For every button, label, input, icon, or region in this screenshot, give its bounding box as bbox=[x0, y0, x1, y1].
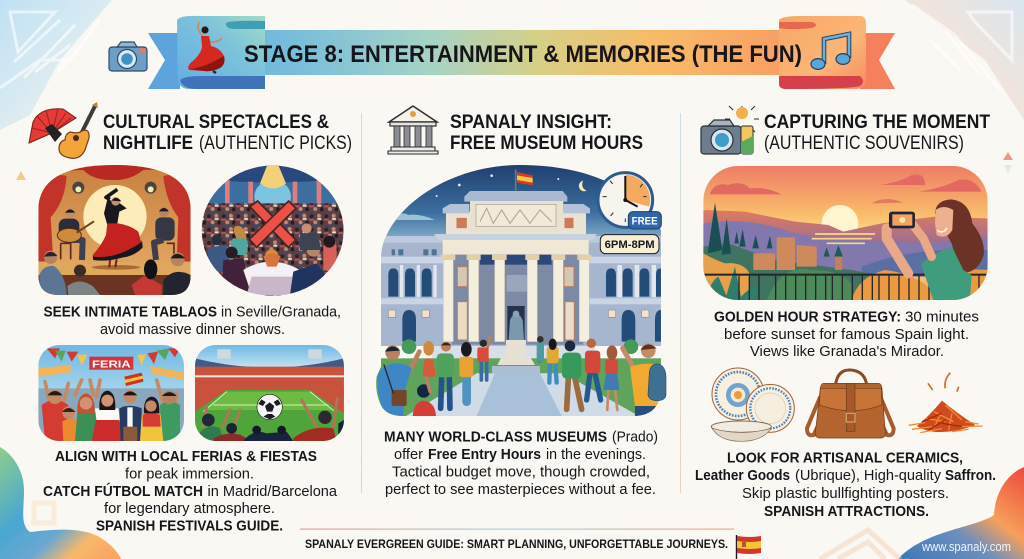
panel: capturing the moment bbox=[695, 106, 996, 520]
icon: ceramic plates and bowl bbox=[711, 368, 794, 441]
panel: free museum hours bbox=[376, 106, 666, 498]
caption: leather goods and saffron: Saffron. bbox=[945, 467, 996, 484]
caption: leather goods and saffron: Leather Goods bbox=[695, 467, 790, 484]
caption: intimate tablaos: in Seville/Granada, bbox=[221, 304, 341, 320]
icon: leather bag bbox=[807, 370, 894, 438]
icon: saffron pile bbox=[909, 373, 983, 433]
icon: backpack bbox=[648, 364, 666, 401]
decorative blob: bottom left bbox=[0, 447, 121, 559]
column dividers bbox=[361, 113, 681, 493]
heading line two: (AUTHENTIC PICKS) bbox=[199, 132, 352, 154]
illustration: feria celebration: FERIA bbox=[92, 359, 131, 370]
red cross bbox=[249, 201, 296, 247]
icon: museum building bbox=[388, 106, 438, 154]
footer bbox=[300, 528, 1011, 559]
label: opening hours bbox=[600, 235, 659, 254]
caption: golden hour strategy: 30 minutes bbox=[905, 308, 979, 326]
decorative blob: bottom right bbox=[820, 467, 1024, 559]
icon: clock with free badge: FREE bbox=[632, 216, 658, 228]
raised arms bbox=[43, 378, 178, 404]
heading: cultural spectacles: CULTURAL SPECTACLES & bbox=[103, 111, 329, 133]
caption: masterpieces without a fee: perfect to see masterpieces without a fee. bbox=[385, 481, 656, 498]
ribbon band bbox=[177, 30, 866, 75]
label: opening hours: 6PM-8PM bbox=[605, 239, 655, 251]
illustration: flamenco tablao stage bbox=[38, 165, 191, 295]
heading: free museum hours: FREE MUSEUM HOURS bbox=[450, 132, 643, 154]
illustration: football stadium bbox=[195, 345, 344, 441]
caption: skip plastic posters: Skip plastic bullfighting posters. bbox=[742, 485, 949, 502]
panel: cultural spectacles and nightlife bbox=[29, 102, 352, 534]
website url: www.spanaly.com bbox=[921, 539, 1011, 554]
caption: tactical budget move: Tactical budget move, though crowded, bbox=[392, 464, 650, 480]
dancer bbox=[93, 189, 143, 267]
caption: free entry hours: offer bbox=[394, 446, 423, 463]
caption: peak immersion: for peak immersion. bbox=[125, 466, 254, 482]
caption: festivals guide: SPANISH FESTIVALS GUIDE. bbox=[96, 518, 283, 534]
portico bbox=[434, 191, 597, 345]
caption: intimate tablaos: SEEK INTIMATE TABLAOS bbox=[44, 304, 217, 320]
decorative corner: top left bbox=[0, 0, 112, 130]
caption: leather goods and saffron: (Ubrique), High-quality bbox=[795, 467, 941, 484]
visitors bbox=[377, 336, 659, 416]
caption: free entry hours: Free Entry Hours bbox=[428, 446, 541, 463]
illustration: massive dinner show with red cross bbox=[202, 165, 344, 297]
caption: many world-class museums: MANY WORLD-CLASS MUSEUMS bbox=[384, 428, 607, 446]
icon: camera with sun and photo bbox=[701, 106, 759, 154]
icon: music notes bbox=[811, 34, 850, 69]
caption: ferias and fiestas: ALIGN WITH LOCAL FERIAS & FIESTAS bbox=[55, 448, 317, 465]
icon: clock with free badge bbox=[598, 173, 661, 229]
icon: red fan and guitar bbox=[29, 102, 98, 158]
icon: blue camera bbox=[109, 42, 147, 71]
caption: futbol match: CATCH FÚTBOL MATCH bbox=[43, 482, 203, 500]
singer bbox=[154, 207, 175, 260]
caption: artisanal ceramics: LOOK FOR ARTISANAL CERAMICS, bbox=[727, 450, 963, 466]
souvenirs row bbox=[711, 368, 983, 441]
guitarist bbox=[57, 208, 94, 260]
caption: granada mirador: Views like Granada's Mirador. bbox=[750, 343, 944, 360]
caption: many world-class museums: (Prado) bbox=[612, 428, 658, 446]
icon: flamenco dancer bbox=[188, 22, 224, 73]
caption: free entry hours: in the evenings. bbox=[546, 446, 646, 463]
illustration: granada sunset with photographer bbox=[703, 166, 988, 300]
caption: spanish attractions: SPANISH ATTRACTIONS. bbox=[764, 503, 929, 520]
statue bbox=[492, 311, 540, 373]
title banner bbox=[148, 16, 895, 89]
ribbon right scroll bbox=[779, 16, 866, 89]
illustration: feria celebration bbox=[38, 345, 184, 441]
curtains bbox=[68, 165, 156, 180]
title text: STAGE 8: ENTERTAINMENT & MEMORIES (THE FUN) bbox=[244, 41, 802, 68]
flag bbox=[516, 169, 533, 191]
museum wings and windows bbox=[388, 249, 661, 342]
photographer bbox=[887, 199, 984, 300]
caption: golden hour strategy: GOLDEN HOUR STRATEGY: bbox=[714, 308, 901, 326]
caption: legendary atmosphere: for legendary atmosphere. bbox=[104, 500, 275, 517]
ribbon right tail bbox=[860, 33, 895, 89]
small decorative triangles bbox=[16, 152, 1013, 180]
ribbon left scroll bbox=[177, 16, 265, 89]
icon: spanish flag bbox=[736, 535, 761, 559]
audience bbox=[39, 251, 191, 295]
caption: futbol match: in Madrid/Barcelona bbox=[208, 483, 338, 500]
decorative corner: top right bbox=[905, 0, 1024, 120]
caption line two: avoid massive dinner shows. bbox=[100, 321, 285, 338]
heading: capturing the moment: CAPTURING THE MOMENT bbox=[764, 111, 990, 133]
ribbon left tail bbox=[148, 33, 180, 89]
illustration: prado museum at dusk bbox=[376, 165, 666, 417]
footer tagline: SPANALY EVERGREEN GUIDE: SMART PLANNING, UNFORGETTABLE JOURNEYS. bbox=[305, 537, 728, 551]
heading: spanaly insight: SPANALY INSIGHT: bbox=[450, 111, 612, 133]
heading line two: NIGHTLIFE bbox=[103, 132, 193, 154]
caption: famous spain light: before sunset for famous Spain light. bbox=[724, 326, 969, 343]
heading: authentic souvenirs: (AUTHENTIC SOUVENIRS) bbox=[764, 132, 964, 154]
stage lights bbox=[72, 182, 84, 194]
